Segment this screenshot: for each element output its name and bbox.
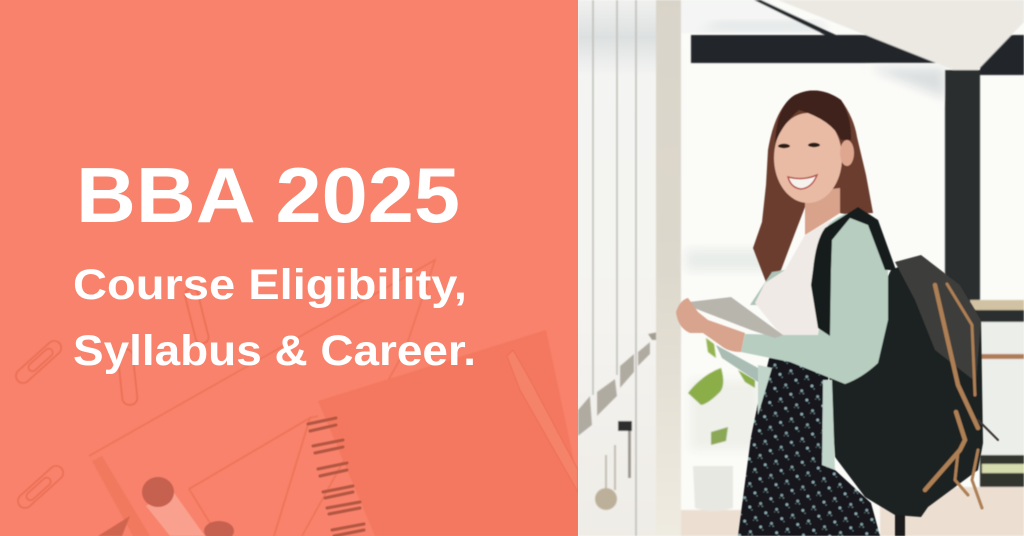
cardigan front panel <box>758 365 835 470</box>
backpack <box>828 255 983 536</box>
pencil <box>507 350 578 492</box>
hands <box>676 298 745 352</box>
face <box>774 113 842 203</box>
cardigan collar <box>750 270 785 305</box>
upper window tint <box>681 0 830 33</box>
smile <box>788 175 817 189</box>
triangle ruler <box>89 260 435 536</box>
pot <box>693 466 733 511</box>
cardigan sleeve <box>741 212 888 384</box>
notebook <box>318 330 578 536</box>
plant <box>688 338 755 445</box>
photo: student with backpack <box>676 91 998 536</box>
white top <box>755 220 831 338</box>
eraser <box>98 477 234 536</box>
photo: hallway background <box>578 0 1024 536</box>
pillar <box>656 0 681 536</box>
panel: coral background with desk items <box>0 0 578 536</box>
ruler scale <box>92 456 150 536</box>
subtitle line 2: Syllabus & Career. <box>73 327 476 375</box>
notebook spiral <box>308 418 364 536</box>
ceiling panel <box>778 0 1024 77</box>
paper clips <box>13 287 210 511</box>
subtitle line 1: Course Eligibility, <box>73 261 467 309</box>
neck <box>805 188 840 235</box>
hair back <box>753 91 873 282</box>
horizontal beam <box>691 35 1024 63</box>
ear <box>840 140 854 166</box>
far arm <box>716 345 758 382</box>
backpack leather straps <box>925 284 998 508</box>
title: BBA 2025 <box>76 151 460 239</box>
vertical beam <box>945 70 980 302</box>
eyes <box>778 143 820 148</box>
skirt <box>738 355 880 536</box>
lockers <box>578 0 657 536</box>
floor <box>681 487 1024 536</box>
tablet <box>681 297 783 338</box>
soft window shadows <box>870 68 945 98</box>
right window frames <box>970 300 1024 487</box>
hair front <box>775 91 851 143</box>
backpack strap <box>811 207 896 336</box>
